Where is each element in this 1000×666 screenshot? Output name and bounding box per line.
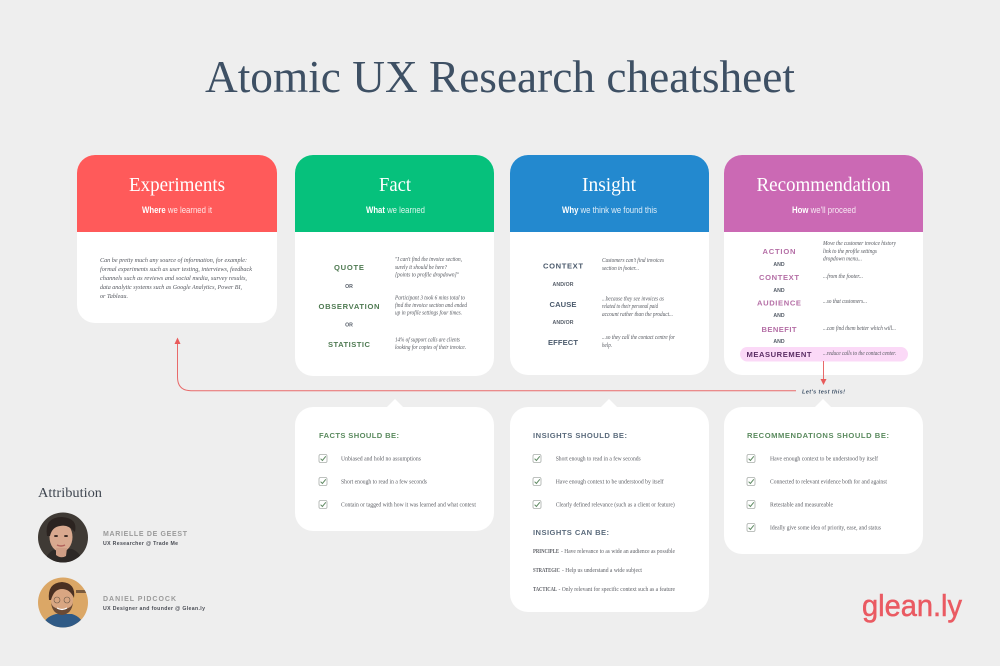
heading: experiments: Experiments: [129, 174, 225, 196]
insight examples: ...so they call the contact centre for: [602, 334, 675, 341]
fact labels: OR: [345, 322, 353, 328]
recommendation labels: [746, 247, 812, 359]
panel: fact: [295, 155, 494, 376]
list: insight types: [533, 548, 675, 593]
insight labels: CAUSE: [550, 300, 576, 309]
title: Atomic UX Research cheatsheet: [205, 51, 795, 102]
heading: insight: Insight: [582, 174, 636, 196]
fact labels: [318, 263, 380, 349]
checklist: facts: Short enough to read in a few seconds: [341, 478, 427, 486]
panel: recommendations should be: [724, 399, 923, 554]
fact examples: find the invoice section and ended: [395, 302, 468, 309]
insight labels: AND/OR: [552, 282, 574, 288]
insight labels: EFFECT: [548, 338, 578, 347]
person: Daniel Pidcock: DANIEL PIDCOCK: [103, 596, 176, 603]
fact labels: STATISTIC: [328, 340, 371, 349]
insight examples: [602, 257, 675, 349]
attribution heading: Attribution: [38, 486, 102, 501]
panel: experiments: [77, 155, 277, 323]
text block: experiments description: or Tableau.: [100, 293, 128, 300]
fact examples: surely it should be here?: [395, 264, 448, 271]
insight labels: [543, 262, 583, 347]
fact examples: 14% of support calls are clients: [395, 336, 460, 344]
insight examples: section in footer...: [602, 265, 639, 272]
subheading: what: What we learned: [366, 205, 425, 215]
recommendation examples: ...from the footer...: [823, 273, 863, 280]
recommendation examples: link to the profile settings: [823, 248, 877, 255]
text block: experiments description: Can be pretty much any source of information, for example:: [100, 257, 247, 264]
heading: recommendations should be: RECOMMENDATIONS SHOULD BE:: [747, 431, 889, 440]
recommendation labels: CONTEXT: [759, 273, 799, 282]
list: insight types: - Only relevant for specific context such as a feature: [558, 586, 675, 593]
panel: insights should be: [510, 399, 709, 612]
panel: recommendation: [724, 155, 923, 375]
avatar: Daniel Pidcock: [38, 577, 88, 628]
list: insight types: - Have relevance to as wide an audience as possible: [561, 548, 675, 555]
panel: insight: [510, 155, 709, 375]
fact examples: looking for copies of their invoice.: [395, 344, 466, 351]
person: Marielle de Geest: MARIELLE DE GEEST: [103, 531, 188, 538]
insight examples: account rather than the product...: [602, 311, 673, 318]
fact labels: OBSERVATION: [318, 302, 380, 311]
callout: let's test this: Let's test this!: [802, 389, 845, 395]
fact examples: up in profile settings four times.: [395, 310, 462, 316]
list: insight types: STRATEGIC: [533, 567, 560, 574]
checklist: recommendations: Ideally give some idea of priority, ease, and status: [770, 524, 881, 532]
subheading: why: Why we think we found this: [562, 205, 657, 215]
person: Daniel Pidcock: UX Designer and founder @ Glean.ly: [103, 606, 205, 612]
subheading: how: How we'll proceed: [792, 205, 856, 215]
text block: experiments description: [100, 257, 252, 300]
heading: recommendation: Recommendation: [756, 174, 890, 196]
insight labels: CONTEXT: [543, 262, 583, 270]
insight labels: AND/OR: [552, 320, 574, 326]
insight examples: Customers can't find invoices: [602, 257, 664, 264]
text block: experiments description: formal experiments such as user testing, interviews, feedback: [100, 266, 252, 273]
recommendation labels: AND: [773, 262, 785, 268]
recommendation labels: AND: [773, 339, 785, 345]
recommendation examples: ...so that customers...: [823, 298, 867, 305]
recommendation labels: AUDIENCE: [757, 298, 801, 308]
insight examples: ...because they see invoices as: [602, 296, 664, 302]
subheading: where: Where we learned it: [142, 205, 212, 215]
recommendation labels: ACTION: [762, 247, 796, 256]
insight examples: related to their personal paid: [602, 303, 659, 310]
checklist: recommendations: Retestable and measureable: [770, 502, 833, 508]
recommendation examples: Move the customer invoice history: [822, 240, 896, 247]
arrow: measurement to test: [820, 361, 826, 385]
person: Daniel Pidcock: [103, 596, 205, 612]
person: Marielle de Geest: [103, 531, 188, 547]
person: Marielle de Geest: UX Researcher @ Trade Me: [103, 541, 178, 547]
fact examples: Participant 3 took 6 mins total to: [394, 294, 465, 302]
text block: experiments description: channels such as reviews and social media, survey results,: [100, 275, 247, 282]
fact examples: "I can't find the invoice section,: [395, 256, 462, 263]
panel: facts should be: [295, 399, 494, 531]
recommendation labels: MEASUREMENT: [746, 350, 812, 359]
checklist: recommendations: [747, 454, 887, 532]
recommendation labels: AND: [773, 313, 785, 319]
recommendation examples: ...reduce calls to the contact center.: [823, 350, 896, 357]
fact examples: [points to profile dropdown]": [395, 272, 459, 278]
checklist: insights: Have enough context to be understood by itself: [556, 478, 664, 486]
heading: fact: Fact: [379, 174, 411, 196]
checklist: facts: Contain or tagged with how it was learned and what context: [341, 502, 476, 508]
fact labels: QUOTE: [334, 263, 364, 272]
list: insight types: - Help us understand a wide subject: [562, 567, 642, 574]
recommendation labels: BENEFIT: [762, 325, 797, 334]
recommendation examples: ...can find them better which will...: [823, 325, 896, 332]
heading: insights can be: INSIGHTS CAN BE:: [533, 528, 609, 537]
list: insight types: TACTICAL: [533, 586, 557, 593]
checklist: insights: [533, 454, 675, 508]
checklist: recommendations: Connected to relevant evidence both for and against: [770, 478, 887, 486]
arrow: test loop back to experiments: [174, 338, 796, 391]
avatar: Marielle de Geest: [38, 512, 88, 563]
checklist: recommendations: Have enough context to be understood by itself: [770, 456, 879, 462]
recommendation examples: [822, 240, 896, 357]
checklist: insights: Short enough to read in a few seconds: [556, 456, 641, 462]
fact examples: [394, 256, 468, 351]
recommendation examples: dropdown menu...: [823, 256, 862, 262]
checklist: facts: Unbiased and hold no assumptions: [341, 456, 421, 462]
heading: facts should be: FACTS SHOULD BE:: [319, 431, 399, 440]
logo: glean.ly: glean.ly: [862, 588, 962, 623]
insight examples: help.: [602, 342, 612, 349]
heading: insights should be: INSIGHTS SHOULD BE:: [533, 431, 627, 440]
text block: experiments description: data analytic systems such as Google Analytics, Power BI,: [100, 284, 242, 291]
checklist: insights: Clearly defined relevance (such as a client or feature): [556, 502, 675, 508]
measurement highlight: [740, 347, 908, 362]
list: insight types: PRINCIPLE: [533, 548, 559, 555]
fact labels: OR: [345, 284, 353, 290]
recommendation labels: AND: [773, 288, 785, 294]
checklist: facts: [319, 454, 476, 508]
